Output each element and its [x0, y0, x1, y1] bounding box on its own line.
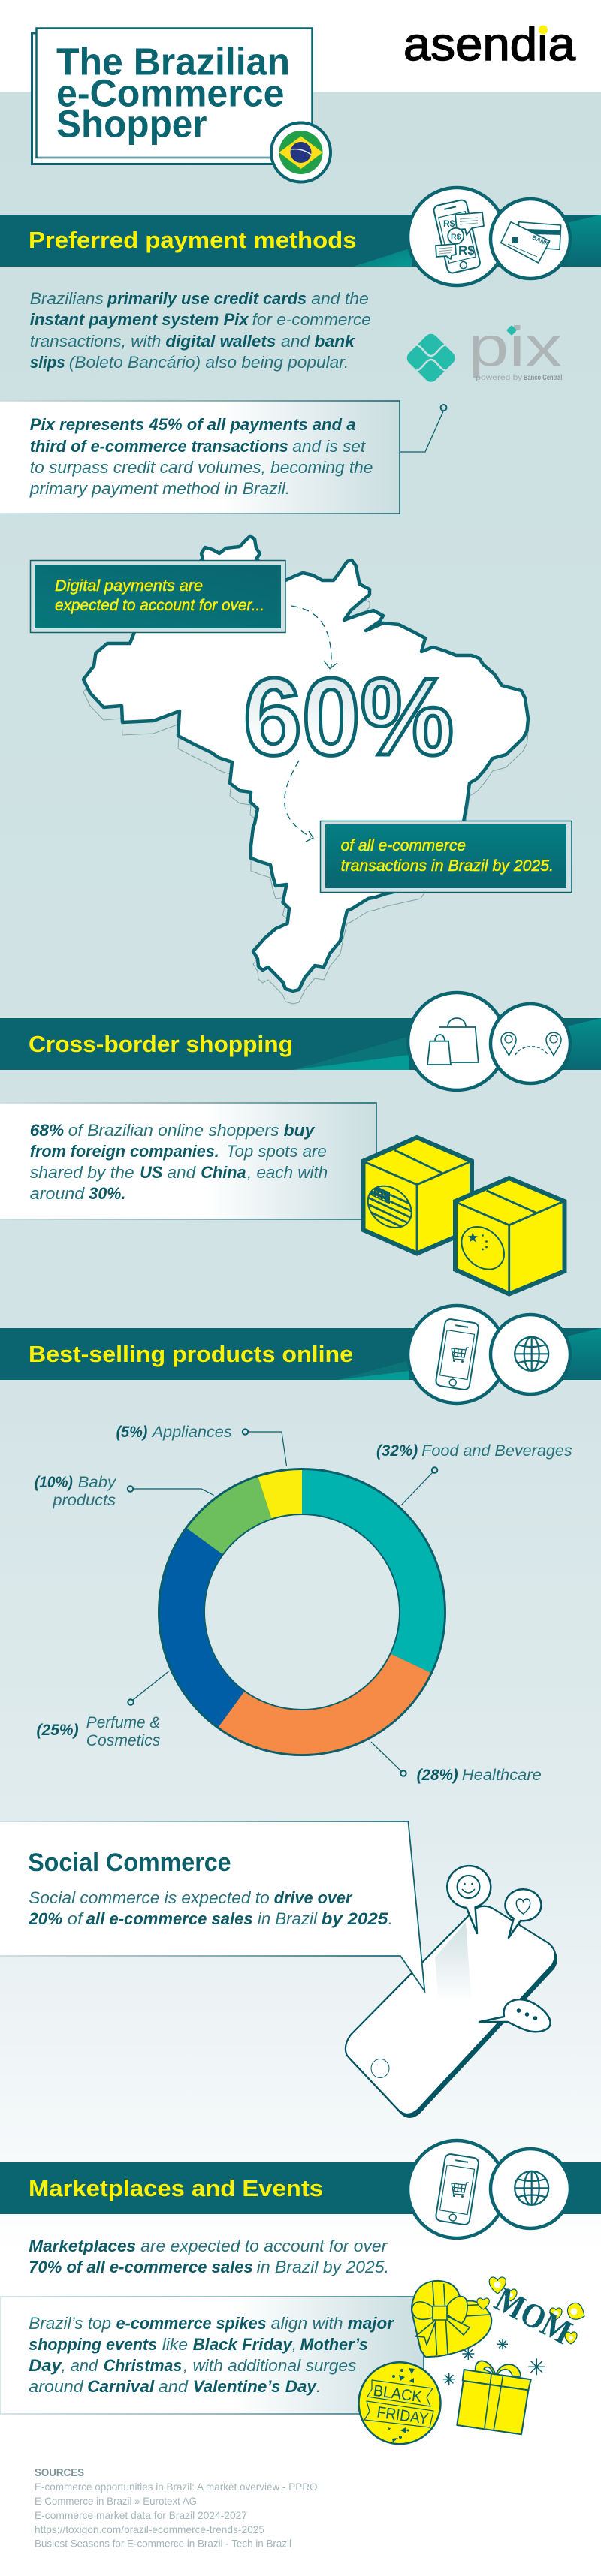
icon: phone with cart — [408, 1306, 506, 1403]
section band: Marketplaces and Events — [0, 2162, 601, 2214]
callout: Pix share — [0, 401, 446, 514]
label: Perfume and Cosmetics: Perfume & — [86, 1713, 160, 1731]
callout: cross-border stat: 30%. — [89, 1184, 125, 1203]
text: payment intro: (Boleto Bancário) also being popular. — [69, 353, 349, 372]
text: marketplaces share: Marketplaces — [29, 2237, 136, 2255]
icon: globe — [491, 1315, 570, 1394]
label: Perfume and Cosmetics — [36, 1671, 168, 1749]
title panel — [32, 29, 313, 164]
sources: E-commerce market data for Brazil 2024-2027 — [35, 2509, 247, 2521]
callout: cross-border stat: of Brazilian online shoppers — [68, 1121, 279, 1140]
callout text — [29, 415, 373, 498]
callout: cross-border stat: shared by the — [30, 1163, 134, 1182]
sources: E-commerce opportunities in Brazil: A market overview - PPRO — [35, 2481, 318, 2493]
callout: cross-border stat: China — [201, 1163, 246, 1182]
connector line — [400, 405, 446, 452]
label: Food and Beverages — [376, 1442, 572, 1505]
icon: bank cards: BANK — [531, 234, 550, 247]
icon: snowflakes — [443, 2339, 545, 2385]
callout: shopping events: like — [162, 2335, 188, 2354]
icon: phone with R$ payments: R$ — [451, 232, 461, 241]
callout: shopping events — [0, 2297, 424, 2414]
logo: Pix — [404, 315, 562, 384]
text: MOM: MOM — [489, 2279, 578, 2352]
callout text: by 2025 — [322, 1909, 388, 1928]
callout: cross-border stat: around — [30, 1184, 86, 1203]
callout text: all e-commerce sales — [86, 1909, 253, 1928]
heading: Cross-border shopping — [29, 1031, 293, 1057]
section band: Preferred payment methods — [0, 215, 601, 267]
heading: Marketplaces and Events — [29, 2175, 323, 2201]
callout: shopping events: align with — [271, 2314, 343, 2333]
icon: Brazil flag — [271, 123, 331, 182]
heading: Social Commerce — [28, 1848, 231, 1877]
icon: heart bubble — [505, 1889, 541, 1938]
icon: Black Friday badge: BLACK — [372, 2382, 423, 2406]
arrow: to transactions box — [285, 761, 313, 842]
heading: Preferred payment methods — [29, 227, 356, 253]
callout text: and is set — [292, 437, 367, 456]
segment: Appliances 5% — [258, 1470, 302, 1519]
callout: cross-border stat: and — [167, 1163, 197, 1182]
callout text: in Brazil — [258, 1909, 318, 1928]
callout text: of — [68, 1909, 85, 1928]
icon: phone with R$ payments: R$ — [458, 243, 475, 258]
callout: shopping events: . — [316, 2377, 321, 2396]
stat: 60%: 60% — [243, 655, 454, 778]
callout: shopping events: , with additional surges — [183, 2356, 356, 2375]
callout: shopping events: , and — [62, 2356, 99, 2375]
icon: location pins — [491, 1004, 570, 1083]
text: payment intro: slips — [30, 353, 65, 372]
text: payment intro: and — [281, 332, 311, 351]
icon: globe — [491, 2149, 570, 2228]
text: payment intro: for e-commerce — [252, 310, 371, 329]
callout: e-commerce transactions: transactions in Brazil by 2025. — [341, 857, 554, 875]
icon: Black Friday badge: FRIDAY — [376, 2403, 430, 2428]
callout: shopping events: shopping events — [29, 2335, 157, 2354]
callout: e-commerce transactions: of all e-commerce — [341, 837, 466, 854]
label: Appliances: Appliances — [151, 1423, 232, 1441]
callout: shopping events: major — [348, 2314, 394, 2333]
callout: shopping events: Day — [29, 2356, 62, 2375]
icon: China parcel — [453, 1178, 565, 1294]
callout: shopping events: e-commerce spikes — [116, 2314, 267, 2333]
label: Baby products: products — [52, 1491, 116, 1509]
callout: cross-border stat: , each with — [247, 1163, 328, 1182]
text: payment intro: digital wallets — [165, 332, 276, 351]
section band: Best-selling products online — [0, 1328, 601, 1380]
callout text: Pix represents 45% of all payments and a — [30, 415, 356, 434]
label: Healthcare: (28%) — [417, 1766, 458, 1784]
sources — [35, 2467, 318, 2550]
callout: shopping events: Christmas — [104, 2356, 182, 2375]
callout text: to surpass credit card volumes, becoming the — [30, 458, 373, 477]
label: Perfume and Cosmetics: (25%) — [36, 1721, 79, 1739]
logo: Pix: Banco Central — [524, 373, 562, 382]
callout: cross-border stat: 68% — [30, 1121, 64, 1140]
section band: Cross-border shopping — [0, 1018, 601, 1070]
callout: shopping events: Black Friday — [193, 2335, 293, 2354]
callout: cross-border stat: Top spots are — [226, 1142, 327, 1161]
donut chart: best-selling products — [158, 1468, 446, 1756]
map of Brazil — [83, 536, 528, 1004]
icon: gift box — [457, 2361, 531, 2434]
icon: typing bubble — [479, 1999, 551, 2032]
callout text: primary payment method in Brazil. — [29, 479, 290, 498]
callout: cross-border stat: US — [140, 1163, 162, 1182]
label: Perfume and Cosmetics: Cosmetics — [86, 1731, 161, 1749]
callout text: 20% — [28, 1909, 62, 1928]
icon: phone with R$ payments: R$ — [443, 218, 455, 229]
icon: Black Friday badge — [359, 2362, 440, 2444]
label: Baby products: (10%) — [35, 1473, 73, 1491]
label: Baby products: Baby — [78, 1473, 116, 1491]
sources: E-Commerce in Brazil » Eurotext AG — [35, 2495, 197, 2507]
callout: digital payments: expected to account for over... — [55, 597, 264, 614]
label: Healthcare: Healthcare — [462, 1766, 542, 1784]
callout text: drive over — [274, 1888, 353, 1907]
logo: Pix: powered by — [476, 373, 523, 382]
callout: digital payments — [30, 560, 285, 632]
logo: Pix: pix — [468, 315, 562, 378]
title: e-Commerce — [56, 72, 284, 114]
callout: shopping events: Mother’s — [300, 2335, 368, 2354]
icon: hearts — [477, 2277, 584, 2344]
callout: social commerce — [0, 1821, 424, 1991]
title — [56, 41, 290, 146]
label: Food and Beverages: Food and Beverages — [421, 1442, 572, 1460]
icon: shopping bags — [408, 993, 506, 1090]
callout: e-commerce transactions — [320, 821, 572, 892]
illustration: tilted phone — [346, 1906, 557, 2118]
callout text — [28, 1888, 393, 1928]
title: Shopper — [56, 102, 207, 146]
callout: shopping events: Brazil’s top — [29, 2314, 111, 2333]
segment: Food and Beverages 32% — [302, 1470, 444, 1673]
text: marketplaces share: in Brazil by 2025. — [257, 2258, 389, 2276]
title: The Brazilian — [56, 41, 290, 83]
icon: phone with R$ payments — [408, 188, 506, 285]
callout text: Social commerce is expected to — [29, 1888, 270, 1907]
callout text: third of e-commerce transactions — [30, 437, 288, 456]
segment: Healthcare 28% — [219, 1653, 430, 1754]
sources: https://toxigon.com/brazil-ecommerce-trends-2025 — [35, 2523, 264, 2535]
text: payment intro: primarily use credit cards — [107, 289, 307, 308]
icon: smile bubble — [447, 1866, 491, 1933]
callout: cross-border stat — [0, 1103, 376, 1219]
label: Appliances: (5%) — [116, 1423, 147, 1441]
callout: shopping events: Carnival — [87, 2377, 155, 2396]
callout: shopping events: around — [29, 2377, 84, 2396]
text: marketplaces share: are expected to account for over — [140, 2237, 388, 2255]
text: payment intro: instant payment system Pix — [30, 310, 249, 329]
sources: SOURCES — [35, 2467, 84, 2479]
callout: shopping events: and — [159, 2377, 189, 2396]
label: Appliances — [116, 1423, 287, 1466]
text: payment intro: transactions, with — [30, 332, 161, 351]
text: marketplaces share — [29, 2237, 389, 2276]
icon: US parcel — [360, 1137, 472, 1254]
logo: asendia: asendia — [403, 19, 576, 71]
callout: cross-border stat: from foreign companies. — [30, 1142, 219, 1161]
callout: shopping events: Valentine’s Day — [193, 2377, 317, 2396]
icon: phone with cart — [408, 2141, 506, 2238]
callout: shopping events: , — [292, 2335, 297, 2354]
text: payment intro: Brazilians — [30, 289, 104, 308]
icon: bank cards — [491, 199, 570, 279]
label: Healthcare — [371, 1742, 542, 1784]
text: payment intro: and the — [311, 289, 369, 308]
callout text: . — [388, 1909, 393, 1928]
label: Food and Beverages: (32%) — [376, 1442, 418, 1460]
callout: digital payments: Digital payments are — [55, 577, 203, 595]
text: marketplaces share: 70% of all e-commerce sales — [29, 2258, 253, 2276]
sources: Busiest Seasons for E-commerce in Brazil - Tech in Brazil — [35, 2538, 291, 2550]
segment: Perfume & Cosmetics 25% — [160, 1529, 245, 1727]
text: payment intro: bank — [314, 332, 355, 351]
segment: Baby products 10% — [187, 1477, 272, 1555]
text: payment intro — [30, 289, 371, 372]
label: Baby products — [35, 1473, 214, 1509]
callout: cross-border stat: buy — [284, 1121, 316, 1140]
heading: Best-selling products online — [29, 1341, 353, 1367]
arrow: down to 60% — [291, 606, 337, 669]
icon: heart gift box — [412, 2281, 491, 2357]
